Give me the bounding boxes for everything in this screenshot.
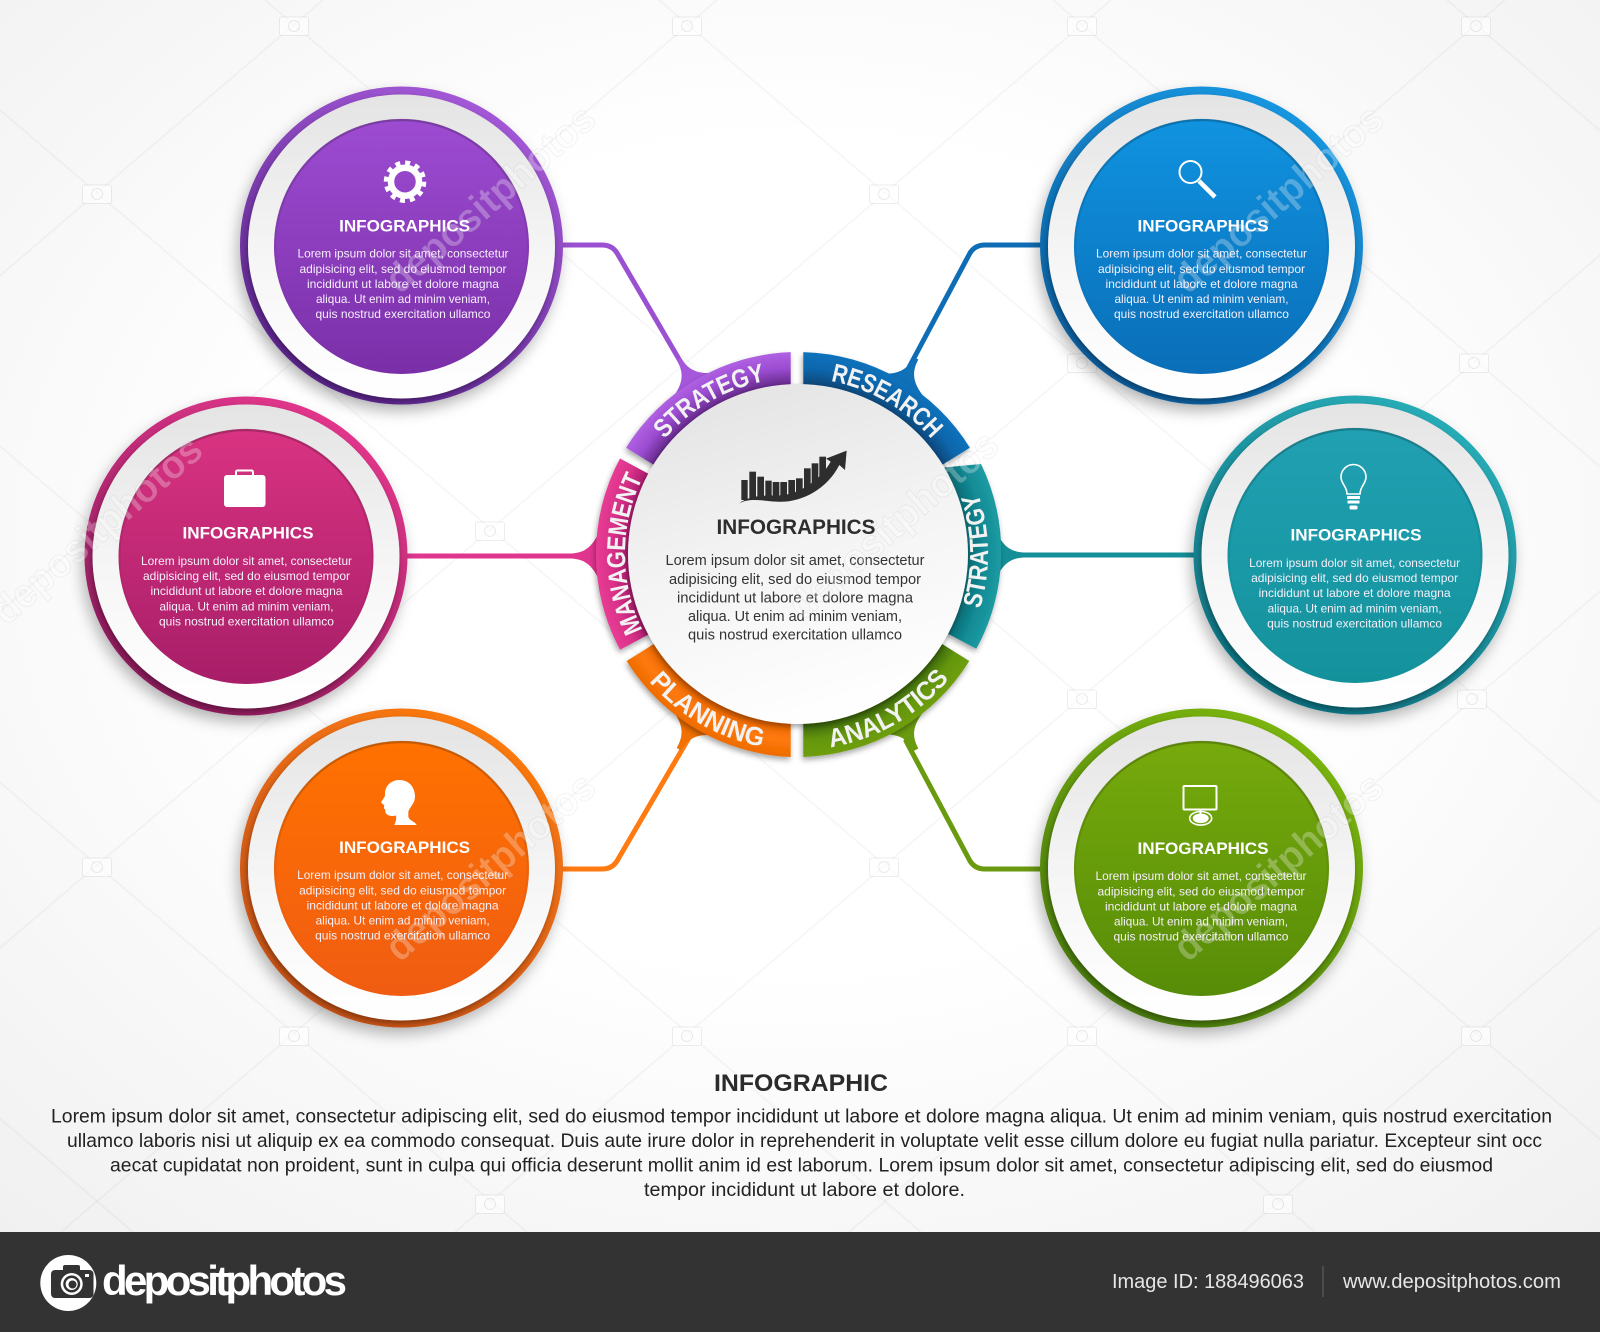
blue body text: Lorem ipsum dolor sit amet, consectetur [1096, 247, 1307, 261]
teal title: INFOGRAPHICS [1290, 526, 1422, 544]
panel: green circle [1040, 708, 1363, 1028]
label: strategy: STRATEGY [654, 364, 761, 436]
curved segment labels [606, 364, 988, 748]
orange body text: incididunt ut labore et dolore magna [307, 898, 499, 912]
purple body text: quis nostrud exercitation ullamco [316, 307, 491, 321]
orange body text: adipisicing elit, sed do eiusmod tempor [299, 883, 506, 897]
icon: camera logo [40, 1255, 96, 1311]
watermarks: depositphotos [377, 96, 604, 302]
green body text: aliqua. Ut enim ad minim veniam, [1114, 914, 1288, 928]
hub body text: adipisicing elit, sed do eiusmod tempor [669, 571, 921, 588]
panel: purple circle [240, 86, 563, 404]
blue body text [1096, 247, 1307, 321]
magenta body text: aliqua. Ut enim ad minim veniam, [160, 599, 334, 613]
teal body text: incididunt ut labore et dolore magna [1259, 586, 1451, 600]
footer paragraph [51, 1106, 1552, 1201]
magenta body text: Lorem ipsum dolor sit amet, consectetur [141, 554, 352, 568]
brand name: depositphotos [102, 1257, 347, 1304]
teal body text: Lorem ipsum dolor sit amet, consectetur [1249, 556, 1460, 570]
watermarks [0, 96, 1392, 970]
icon: gear [386, 163, 424, 201]
watermarks: depositphotos [1165, 764, 1392, 970]
purple body text: aliqua. Ut enim ad minim veniam, [316, 292, 490, 306]
footer paragraph: aecat cupidatat non proident, sunt in culpa qui officia deserunt mollit anim id est laborum. Lorem ipsum dolor sit amet, consectetur adipiscing elit, sed do eiusmod [110, 1154, 1493, 1176]
segment: management magenta [596, 458, 653, 650]
teal body text [1249, 556, 1460, 630]
icon: magnifier [1180, 161, 1215, 197]
green body text [1096, 869, 1307, 944]
icon: light bulb [1341, 464, 1366, 510]
hub body text: incididunt ut labore et dolore magna [677, 590, 914, 606]
magenta body text: quis nostrud exercitation ullamco [159, 614, 334, 628]
teal body text: quis nostrud exercitation ullamco [1267, 616, 1442, 630]
blue body text: aliqua. Ut enim ad minim veniam, [1114, 292, 1288, 306]
hub title: INFOGRAPHICS [716, 516, 876, 539]
magenta title: INFOGRAPHICS [182, 524, 314, 542]
blue title: INFOGRAPHICS [1138, 217, 1268, 235]
blue body text: incididunt ut labore et dolore magna [1106, 277, 1298, 291]
icon: briefcase [224, 470, 266, 507]
hub body text: Lorem ipsum dolor sit amet, consectetur [666, 552, 925, 569]
segment: strategy purple [626, 352, 791, 467]
green body text: adipisicing elit, sed do eiusmod tempor [1098, 884, 1304, 898]
website: www.depositphotos.com [1342, 1271, 1561, 1293]
panel: magenta circle [84, 396, 408, 716]
panel: teal circle [1194, 396, 1516, 714]
orange body text: quis nostrud exercitation ullamco [315, 929, 490, 943]
segmented ring [596, 352, 1001, 757]
footer paragraph: ullamco laboris nisi ut aliquip ex ea commodo consequat. Duis aute irure dolor in reprehenderit in voluptate velit esse cillum dolore eu fugiat nulla pariatur. Excepteur sint occ [67, 1130, 1542, 1152]
label: research: RESEARCH [832, 364, 944, 438]
label: strategy right: STRATEGY [961, 498, 988, 608]
green body text: incididunt ut labore et dolore magna [1105, 899, 1297, 913]
hub body text: aliqua. Ut enim ad minim veniam, [688, 608, 902, 625]
purple title: INFOGRAPHICS [339, 217, 470, 235]
green body text: Lorem ipsum dolor sit amet, consectetur [1096, 869, 1307, 883]
watermarks: depositphotos [780, 422, 1007, 628]
segment: strategy teal [938, 464, 1001, 649]
segment: research blue [803, 352, 970, 467]
magenta body text: adipisicing elit, sed do eiusmod tempor [143, 569, 350, 583]
connector lines [400, 245, 1195, 869]
green title: INFOGRAPHICS [1138, 840, 1268, 858]
footer paragraph: tempor incididunt ut labore et dolore. [644, 1179, 965, 1201]
blue body text: quis nostrud exercitation ullamco [1114, 307, 1289, 321]
teal body text: adipisicing elit, sed do eiusmod tempor [1251, 571, 1458, 585]
hub body text [666, 552, 925, 644]
orange body text: Lorem ipsum dolor sit amet, consectetur [297, 868, 508, 882]
purple body text: incididunt ut labore et dolore magna [307, 277, 499, 291]
panel: orange circle [240, 708, 563, 1028]
segment: planning orange [627, 641, 791, 757]
label: analytics: ANALYTICS [831, 670, 947, 748]
image id: Image ID: 188496063 [1112, 1271, 1304, 1293]
icon: head silhouette [381, 780, 417, 825]
hub body text: quis nostrud exercitation ullamco [688, 626, 902, 644]
watermarks: depositphotos [1165, 96, 1392, 302]
brand bar [0, 1232, 1600, 1332]
orange body text: aliqua. Ut enim ad minim veniam, [316, 914, 490, 928]
orange body text [297, 868, 508, 943]
footer paragraph: Lorem ipsum dolor sit amet, consectetur adipiscing elit, sed do eiusmod tempor incididunt ut labore et dolore magna aliqua. Ut enim ad minim veniam, quis nostrud exercitation [51, 1106, 1552, 1128]
label: management: MANAGEMENT [606, 470, 642, 636]
icon: monitor [1184, 786, 1216, 825]
magenta body text [141, 554, 352, 628]
purple body text [298, 247, 509, 321]
segment: analytics green [803, 641, 969, 757]
footer heading: INFOGRAPHIC [714, 1070, 888, 1097]
purple body text: Lorem ipsum dolor sit amet, consectetur [298, 247, 509, 261]
orange title: INFOGRAPHICS [339, 839, 470, 857]
icon: rising bar chart with arrow [739, 451, 847, 503]
center hub [628, 384, 968, 724]
magenta body text: incididunt ut labore et dolore magna [150, 584, 343, 598]
label: planning: PLANNING [650, 670, 764, 746]
connector flares [569, 347, 1026, 761]
blue body text: adipisicing elit, sed do eiusmod tempor [1098, 262, 1305, 276]
watermarks: depositphotos [377, 764, 604, 970]
panel: blue circle [1040, 86, 1363, 404]
purple body text: adipisicing elit, sed do eiusmod tempor [300, 262, 506, 276]
teal body text: aliqua. Ut enim ad minim veniam, [1268, 601, 1442, 615]
green body text: quis nostrud exercitation ullamco [1114, 930, 1289, 944]
